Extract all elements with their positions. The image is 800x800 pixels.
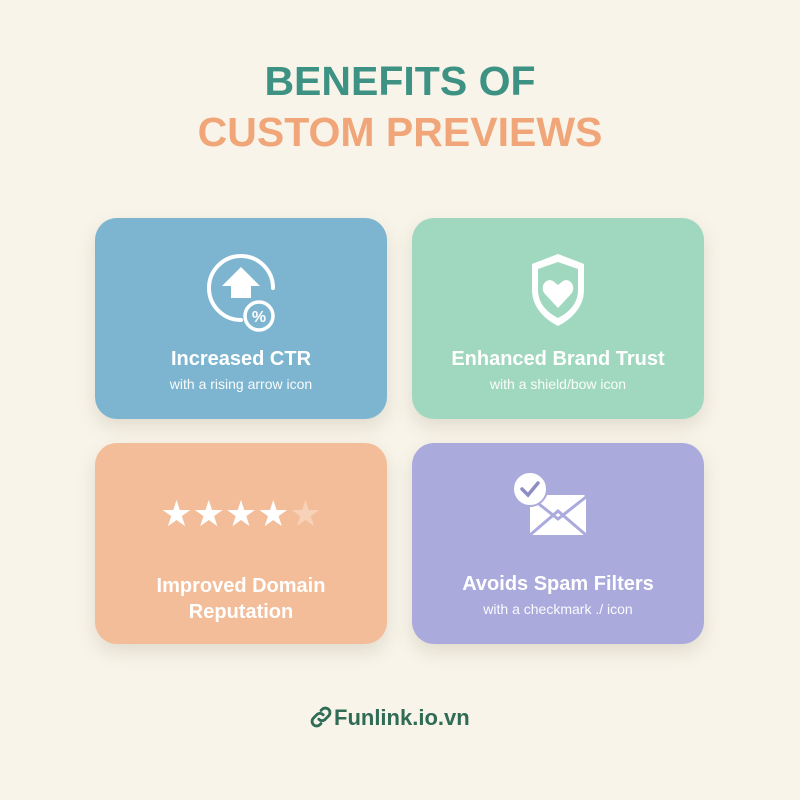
title bbox=[198, 58, 602, 155]
icon: shield bbox=[532, 254, 584, 326]
text: CUSTOM PREVIEWS bbox=[198, 109, 602, 155]
heading bbox=[157, 575, 325, 623]
subtext: with a shield/bow icon bbox=[490, 376, 626, 392]
subtext: with a rising arrow icon bbox=[170, 376, 312, 392]
text: BENEFITS OF bbox=[264, 58, 536, 104]
subtext: with a checkmark ./ icon bbox=[483, 601, 633, 617]
panel: increased CTR bbox=[95, 218, 387, 419]
heading: Enhanced Brand Trust bbox=[451, 348, 665, 370]
icon: rising arrow: % bbox=[252, 309, 266, 326]
heading: Reputation bbox=[189, 601, 293, 623]
heading: Avoids Spam Filters bbox=[462, 573, 654, 595]
icon: link bbox=[310, 706, 332, 728]
panel: domain reputation bbox=[95, 443, 387, 644]
panel: brand trust bbox=[412, 218, 704, 419]
heading: Improved Domain bbox=[157, 575, 325, 597]
icon: rising arrow bbox=[207, 254, 275, 332]
icon: stars: ★★★★★ bbox=[160, 493, 322, 534]
footer: brand: Funlink.io.vn bbox=[334, 705, 470, 730]
heading: Increased CTR bbox=[171, 348, 311, 370]
icon: envelope with check bbox=[514, 473, 586, 535]
panel: spam filters bbox=[412, 443, 704, 644]
